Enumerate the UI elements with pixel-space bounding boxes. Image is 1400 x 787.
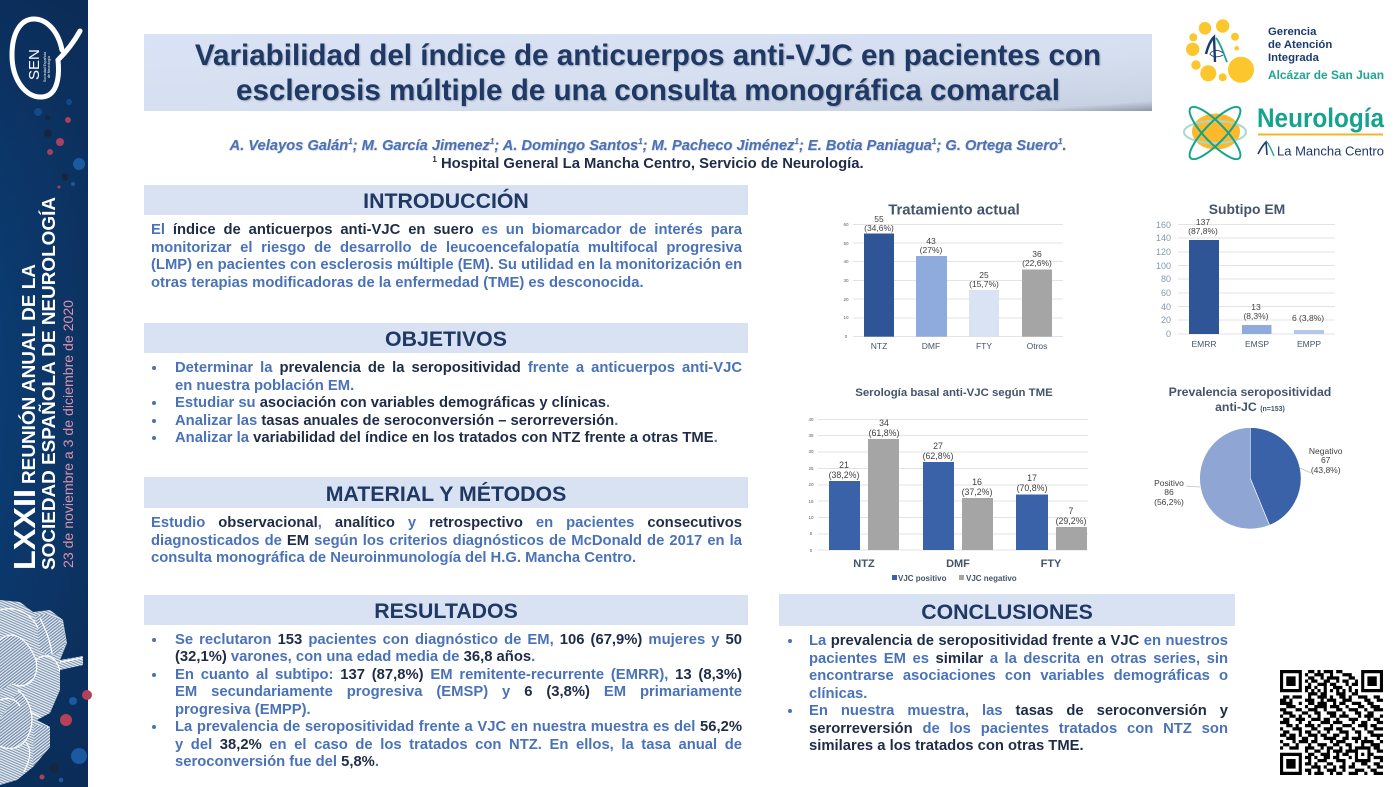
bar chart: serología basal: (61,8%) bbox=[869, 428, 899, 438]
text: conclusiones: clínicas. bbox=[809, 686, 867, 702]
pie chart: prevalencia seropositividad: 86 bbox=[1164, 487, 1174, 497]
bar chart: serología basal: 27 bbox=[933, 441, 943, 451]
bar chart: serología basal: 16 bbox=[972, 477, 982, 487]
bar chart: tratamiento actual: Tratamiento actual bbox=[888, 202, 1020, 218]
bar chart: serología basal: (62,8%) bbox=[923, 451, 953, 461]
heading: objetivos bbox=[144, 323, 748, 353]
bar chart: subtipo EM: 120 bbox=[1156, 247, 1171, 257]
logo: Neurología La Mancha Centro: Neurología bbox=[1257, 103, 1385, 133]
legend: VJC negativo bbox=[966, 574, 1017, 583]
text: resultados: La prevalencia de seropositividad frente a VJC en nuestra muestra es del 56,2% bbox=[175, 719, 742, 735]
illustration: brain bbox=[0, 595, 88, 787]
congress title: LXXII bbox=[7, 489, 42, 570]
pie chart: prevalencia seropositividad: (56,2%) bbox=[1154, 497, 1184, 507]
bar chart: subtipo EM: 80 bbox=[1161, 274, 1171, 284]
bar chart: subtipo EM: 140 bbox=[1156, 233, 1171, 243]
bar chart: subtipo EM: (87,8%) bbox=[1188, 226, 1218, 236]
bar chart: subtipo EM bbox=[1156, 201, 1335, 349]
affiliation: 1 Hospital General La Mancha Centro, Servicio de Neurología. bbox=[432, 155, 864, 172]
bar chart: serología basal: 21 bbox=[839, 460, 849, 470]
text: material y métodos: Estudio observacional, analítico y retrospectivo en pacientes consecutivos bbox=[151, 515, 742, 531]
text: resultados: En cuanto al subtipo: 137 (87,8%) EM remitente-recurrente (EMRR), 13 (8,3%) bbox=[175, 667, 742, 683]
bar chart: serología basal: 0 bbox=[810, 548, 813, 553]
logo: Neurología La Mancha Centro bbox=[1183, 103, 1385, 160]
bar chart: serología basal: 10 bbox=[808, 515, 814, 520]
text: conclusiones: encontrarse asociaciones con variables demográficas o bbox=[809, 668, 1228, 684]
bar chart: tratamiento actual: DMF bbox=[922, 341, 940, 351]
pie chart: prevalencia seropositividad: Positivo bbox=[1154, 478, 1184, 488]
logo: SEN brain: de Neurología bbox=[47, 56, 51, 78]
logo: Gerencia de Atención Integrada: de Atención bbox=[1268, 39, 1332, 51]
bar chart: serología basal: Serología basal anti-VJC según TME bbox=[855, 387, 1053, 399]
text: objetivos: Estudiar su asociación con variables demográficas y clínicas. bbox=[175, 395, 610, 411]
heading: objetivos: OBJETIVOS bbox=[385, 327, 507, 351]
bar chart: tratamiento actual bbox=[843, 202, 1063, 351]
bar chart: serología basal: 7 bbox=[1069, 506, 1074, 516]
title banner: Variabilidad del índice de anticuerpos anti-VJC en pacientes con bbox=[195, 39, 1101, 72]
bar chart: tratamiento actual: NTZ bbox=[871, 341, 887, 351]
authors: A. Velayos Galán1; M. García Jimenez1; A. Domingo Santos1; M. Pacheco Jiménez1; E. Botia Paniagua1; G. Ortega Suero1. bbox=[230, 137, 1066, 154]
bar chart: serología basal: 20 bbox=[808, 482, 814, 487]
bar chart: subtipo EM: 20 bbox=[1161, 315, 1171, 325]
legend: VJC positivo bbox=[898, 574, 947, 583]
pie chart: prevalencia seropositividad: anti-JC (n=153) bbox=[1215, 400, 1285, 414]
bar chart: subtipo EM: 13 bbox=[1251, 302, 1261, 312]
text: objetivos bbox=[152, 360, 742, 446]
bar chart: tratamiento actual: 60 bbox=[843, 222, 849, 227]
heading: resultados bbox=[144, 595, 748, 625]
text: introducción bbox=[151, 222, 742, 291]
bar chart: subtipo EM: 60 bbox=[1161, 288, 1171, 298]
bar chart: serología basal: (29,2%) bbox=[1056, 516, 1086, 526]
pie chart: prevalencia seropositividad: Prevalencia seropositividad bbox=[1169, 385, 1331, 399]
bar chart: serología basal: 17 bbox=[1027, 473, 1037, 483]
text: introducción: El índice de anticuerpos anti-VJC en suero es un biomarcador de interés para bbox=[151, 222, 742, 238]
bar chart: tratamiento actual: 36 bbox=[1032, 249, 1042, 259]
pie chart: prevalencia seropositividad: Negativo bbox=[1309, 446, 1343, 456]
bar chart: subtipo EM: 0 bbox=[1166, 329, 1171, 339]
logo: Gerencia de Atención Integrada: Alcázar de San Juan bbox=[1268, 70, 1384, 82]
text: conclusiones: serorreversión de los pacientes tratados con NTZ son bbox=[809, 721, 1228, 737]
heading: resultados: RESULTADOS bbox=[374, 599, 518, 623]
bar chart: tratamiento actual: (22,6%) bbox=[1022, 258, 1052, 268]
heading: conclusiones bbox=[779, 594, 1235, 626]
logo: Neurología La Mancha Centro: La Mancha Centro bbox=[1277, 144, 1384, 158]
bar chart: subtipo EM: 100 bbox=[1156, 261, 1171, 271]
logo: Gerencia de Atención Integrada: Gerencia bbox=[1268, 26, 1317, 38]
bar chart: subtipo EM: 137 bbox=[1196, 217, 1210, 227]
text: material y métodos: consulta monográfica de Neuroinmunología del H.G. Mancha Centro. bbox=[151, 550, 636, 566]
QR code bbox=[1280, 670, 1383, 775]
text: introducción: otras terapias modificadoras de la enfermedad (TME) es desconocida. bbox=[151, 275, 644, 291]
logo: SEN brain: SEN bbox=[26, 49, 43, 80]
bar chart: tratamiento actual: Otros bbox=[1027, 341, 1047, 351]
bar chart: serología basal: 40 bbox=[808, 417, 814, 422]
bar chart: tratamiento actual: 55 bbox=[874, 214, 884, 224]
congress title: 23 de noviembre a 3 de diciembre de 2020 bbox=[61, 300, 76, 568]
heading: introducción bbox=[144, 185, 748, 215]
text: resultados: EM secundariamente progresiva (EMSP) y 6 (3,8%) EM primariamente bbox=[175, 684, 742, 700]
text: introducción: monitorizar el riesgo de desarrollo de leucoencefalopatía multifocal progresiva bbox=[151, 240, 742, 256]
congress title: REUNIÓN ANUAL DE LA bbox=[18, 264, 39, 484]
text: resultados bbox=[152, 632, 742, 770]
bar chart: tratamiento actual: (15,7%) bbox=[969, 279, 999, 289]
bar chart: tratamiento actual: 25 bbox=[979, 270, 989, 280]
bar chart: serología basal: (70,8%) bbox=[1017, 483, 1047, 493]
text: introducción: (LMP) en pacientes con esclerosis múltiple (EM). Su utilidad en la monitorización en bbox=[151, 257, 742, 273]
text: material y métodos bbox=[151, 515, 742, 566]
decorative network dots bbox=[34, 99, 92, 782]
bar chart: serología basal: 25 bbox=[808, 466, 814, 471]
bar chart: tratamiento actual: 43 bbox=[926, 236, 936, 246]
bar chart: serología basal: 30 bbox=[808, 449, 814, 454]
bar chart: serología basal: NTZ bbox=[853, 558, 875, 570]
text: conclusiones bbox=[788, 633, 1228, 754]
bar chart: tratamiento actual: 10 bbox=[843, 315, 849, 320]
text: resultados: seroconversión fue del 5,8%. bbox=[175, 754, 379, 770]
icon: small A mark bbox=[1258, 142, 1274, 156]
heading: conclusiones: CONCLUSIONES bbox=[921, 600, 1093, 624]
bar chart: tratamiento actual: (34,6%) bbox=[864, 223, 894, 233]
bar chart: subtipo EM: 40 bbox=[1161, 302, 1171, 312]
bar chart: serología basal: (37,2%) bbox=[962, 487, 992, 497]
bar chart: tratamiento actual: 50 bbox=[843, 241, 849, 246]
logo: SEN brain: Sociedad Española bbox=[43, 52, 47, 82]
bar chart: serología basal: 34 bbox=[879, 418, 889, 428]
icon: A mark bbox=[1206, 37, 1227, 62]
bar chart: serología basal: FTY bbox=[1041, 558, 1062, 570]
bar chart: serología basal: DMF bbox=[946, 558, 970, 570]
bar chart: serología basal bbox=[808, 387, 1088, 583]
bar chart: subtipo EM: 160 bbox=[1156, 220, 1171, 230]
heading: material y métodos: MATERIAL Y MÉTODOS bbox=[326, 482, 566, 506]
bar chart: subtipo EM: Subtipo EM bbox=[1209, 201, 1285, 217]
bar chart: tratamiento actual: 30 bbox=[843, 278, 849, 283]
text: conclusiones: similares a los tratados con otras TME. bbox=[809, 738, 1084, 754]
text: objetivos: en nuestra población EM. bbox=[175, 378, 354, 394]
bar chart: tratamiento actual: (27%) bbox=[920, 245, 942, 255]
bar chart: tratamiento actual: 40 bbox=[843, 259, 849, 264]
logo: Gerencia de Atención Integrada: Integrada bbox=[1268, 52, 1320, 64]
title banner: esclerosis múltiple de una consulta monográfica comarcal bbox=[236, 74, 1060, 107]
text: resultados: (32,1%) varones, con una edad media de 36,8 años. bbox=[175, 649, 535, 665]
congress title: SOCIEDAD ESPAÑOLA DE NEUROLOGÍA bbox=[38, 197, 59, 570]
bar chart: tratamiento actual: 0 bbox=[845, 334, 848, 339]
text: conclusiones: La prevalencia de seropositividad frente a VJC en nuestros bbox=[809, 633, 1228, 649]
bar chart: tratamiento actual: FTY bbox=[976, 341, 992, 351]
bar chart: serología basal: (38,2%) bbox=[829, 470, 859, 480]
text: objetivos: Analizar la variabilidad del índice en los tratados con NTZ frente a otras TME. bbox=[175, 430, 718, 446]
text: conclusiones: pacientes EM es similar a la descrita en otras series, sin bbox=[809, 651, 1228, 667]
title banner bbox=[144, 34, 1152, 111]
bar chart: subtipo EM: 6 (3,8%) bbox=[1292, 313, 1324, 323]
bar chart: serología basal: 15 bbox=[808, 499, 814, 504]
text: resultados: y del 38,2% en el caso de los tratados con NTZ. En ellos, la tasa anual de bbox=[175, 737, 742, 753]
bar chart: subtipo EM: (8,3%) bbox=[1243, 311, 1269, 321]
bar chart: serología basal: 35 bbox=[808, 433, 814, 438]
text: objetivos: Analizar las tasas anuales de seroconversión – serorreversión. bbox=[175, 413, 618, 429]
logo: Gerencia de Atención Integrada bbox=[1186, 19, 1384, 83]
sidebar: congress banner bbox=[0, 0, 92, 787]
text: conclusiones: En nuestra muestra, las tasas de seroconversión y bbox=[809, 703, 1228, 719]
logo: SEN brain bbox=[12, 19, 80, 97]
bar chart: subtipo EM: EMSP bbox=[1245, 339, 1269, 349]
pie chart: prevalencia seropositividad bbox=[1154, 385, 1343, 529]
pie chart: prevalencia seropositividad: 67 bbox=[1321, 455, 1331, 465]
text: resultados: Se reclutaron 153 pacientes con diagnóstico de EM, 106 (67,9%) mujeres y 50 bbox=[175, 632, 742, 648]
heading: material y métodos bbox=[144, 477, 748, 508]
heading: introducción: INTRODUCCIÓN bbox=[363, 189, 529, 213]
bar chart: tratamiento actual: 20 bbox=[843, 297, 849, 302]
text: resultados: progresiva (EMPP). bbox=[175, 702, 311, 718]
text: material y métodos: diagnosticados de EM según los criterios diagnósticos de McDonald de 2017 en la bbox=[151, 533, 742, 549]
bar chart: serología basal: 5 bbox=[810, 531, 813, 536]
legend bbox=[892, 574, 1017, 583]
congress title bbox=[7, 197, 76, 570]
pie chart: prevalencia seropositividad: (43,8%) bbox=[1311, 465, 1341, 475]
bar chart: subtipo EM: EMPP bbox=[1297, 339, 1321, 349]
bar chart: subtipo EM: EMRR bbox=[1191, 339, 1217, 349]
text: objetivos: Determinar la prevalencia de la seropositividad frente a anticuerpos anti-VJC bbox=[175, 360, 742, 376]
